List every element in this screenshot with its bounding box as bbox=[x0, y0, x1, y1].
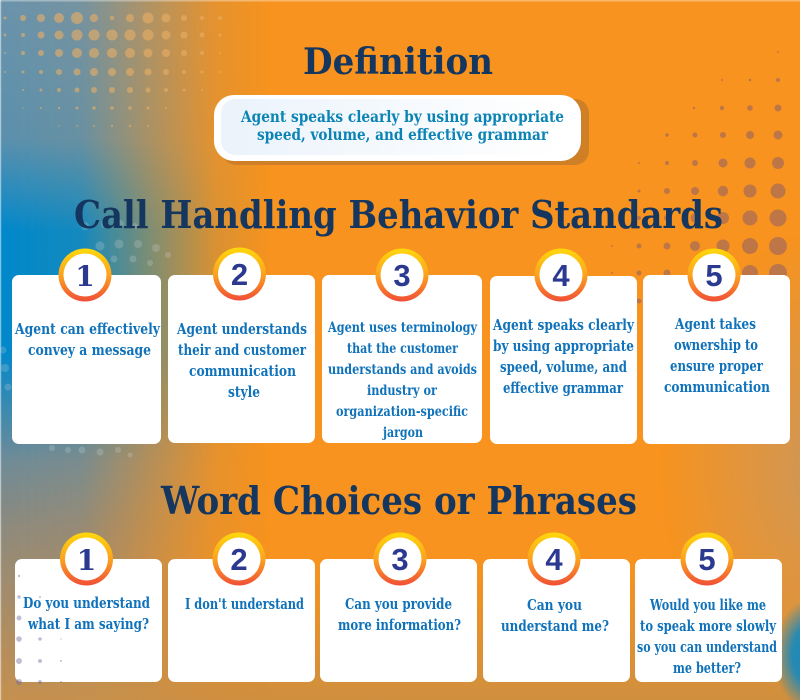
panel: phrase 1: Do you understand bbox=[23, 594, 150, 612]
panel: standard 5: ownership to bbox=[674, 336, 758, 354]
panel: standard 5: Agent takes bbox=[674, 315, 756, 333]
panel: phrase 1: what I am saying? bbox=[27, 615, 149, 633]
panel: standard 1: 1 bbox=[75, 260, 95, 293]
panel: standard 5: 5 bbox=[705, 258, 723, 293]
panel: phrase 3: more information? bbox=[338, 616, 461, 634]
dot pattern: top left bbox=[4, 12, 222, 127]
definition callout: Agent speaks clearly by using appropriate bbox=[240, 107, 564, 126]
panel: standard 2: communication bbox=[189, 362, 296, 380]
panel: standard 4: speed, volume, and bbox=[500, 358, 627, 376]
panel: phrase 5 bbox=[635, 532, 782, 682]
dot pattern: right bbox=[611, 51, 787, 304]
panel: standard 1: convey a message bbox=[28, 341, 151, 359]
panel: standard 2 bbox=[168, 248, 315, 443]
panel: phrase 4: 4 bbox=[545, 542, 563, 577]
panel: standard 4: effective grammar bbox=[503, 379, 624, 397]
panel: standard 3: industry or bbox=[367, 383, 437, 399]
panel: standard 3 bbox=[322, 248, 482, 443]
panel: phrase 5: 5 bbox=[698, 542, 716, 577]
panel: standard 3: that the customer bbox=[347, 341, 458, 357]
panel: phrase 4: understand me? bbox=[501, 617, 609, 635]
panel: standard 5 bbox=[643, 248, 790, 444]
panel: standard 3: Agent uses terminology bbox=[327, 320, 478, 336]
heading: Word Choices or Phrases: Word Choices or Phrases bbox=[160, 478, 637, 523]
dot pattern: over phrase card 1 bbox=[16, 575, 62, 685]
panel: phrase 4 bbox=[483, 532, 630, 682]
panel: phrase 2 bbox=[168, 532, 315, 682]
panel: standard 1: Agent can effectively bbox=[14, 320, 161, 338]
panel: standard 4: Agent speaks clearly bbox=[492, 316, 635, 334]
panel: phrase 4: Can you bbox=[527, 596, 582, 614]
panel: standard 3: understands and avoids bbox=[328, 362, 477, 378]
definition callout bbox=[214, 95, 589, 165]
panel: standard 2: Agent understands bbox=[176, 320, 307, 338]
panel: standard 4 bbox=[490, 248, 637, 444]
panel: standard 4: by using appropriate bbox=[493, 337, 634, 355]
panel: standard 3: organization-specific bbox=[336, 404, 468, 420]
panel: standard 1 bbox=[12, 248, 161, 444]
panel: standard 2: 2 bbox=[231, 257, 248, 292]
panel: phrase 3 bbox=[320, 532, 477, 682]
panel: phrase 1: 1 bbox=[77, 544, 96, 577]
panel: phrase 5: me better? bbox=[673, 659, 741, 677]
panel: phrase 2: I don't understand bbox=[185, 595, 304, 613]
panel: phrase 1 bbox=[15, 532, 162, 682]
heading: Definition: Definition bbox=[303, 41, 493, 83]
panel: phrase 3: Can you provide bbox=[345, 595, 452, 613]
panel: standard 3: 3 bbox=[393, 258, 411, 293]
panel: standard 2: style bbox=[228, 383, 260, 401]
panel: standard 5: ensure proper bbox=[670, 357, 764, 375]
panel: standard 2: their and customer bbox=[178, 341, 307, 359]
dot pattern: lower left bbox=[0, 220, 171, 458]
panel: phrase 2: 2 bbox=[230, 542, 248, 577]
definition callout: speed, volume, and effective grammar bbox=[257, 125, 548, 144]
panel: standard 3: jargon bbox=[381, 425, 423, 441]
panel: phrase 3: 3 bbox=[391, 542, 409, 577]
heading: Call Handling Behavior Standards: Call Handling Behavior Standards bbox=[74, 192, 723, 237]
panel: standard 4: 4 bbox=[552, 258, 570, 293]
panel: standard 5: communication bbox=[664, 378, 770, 396]
